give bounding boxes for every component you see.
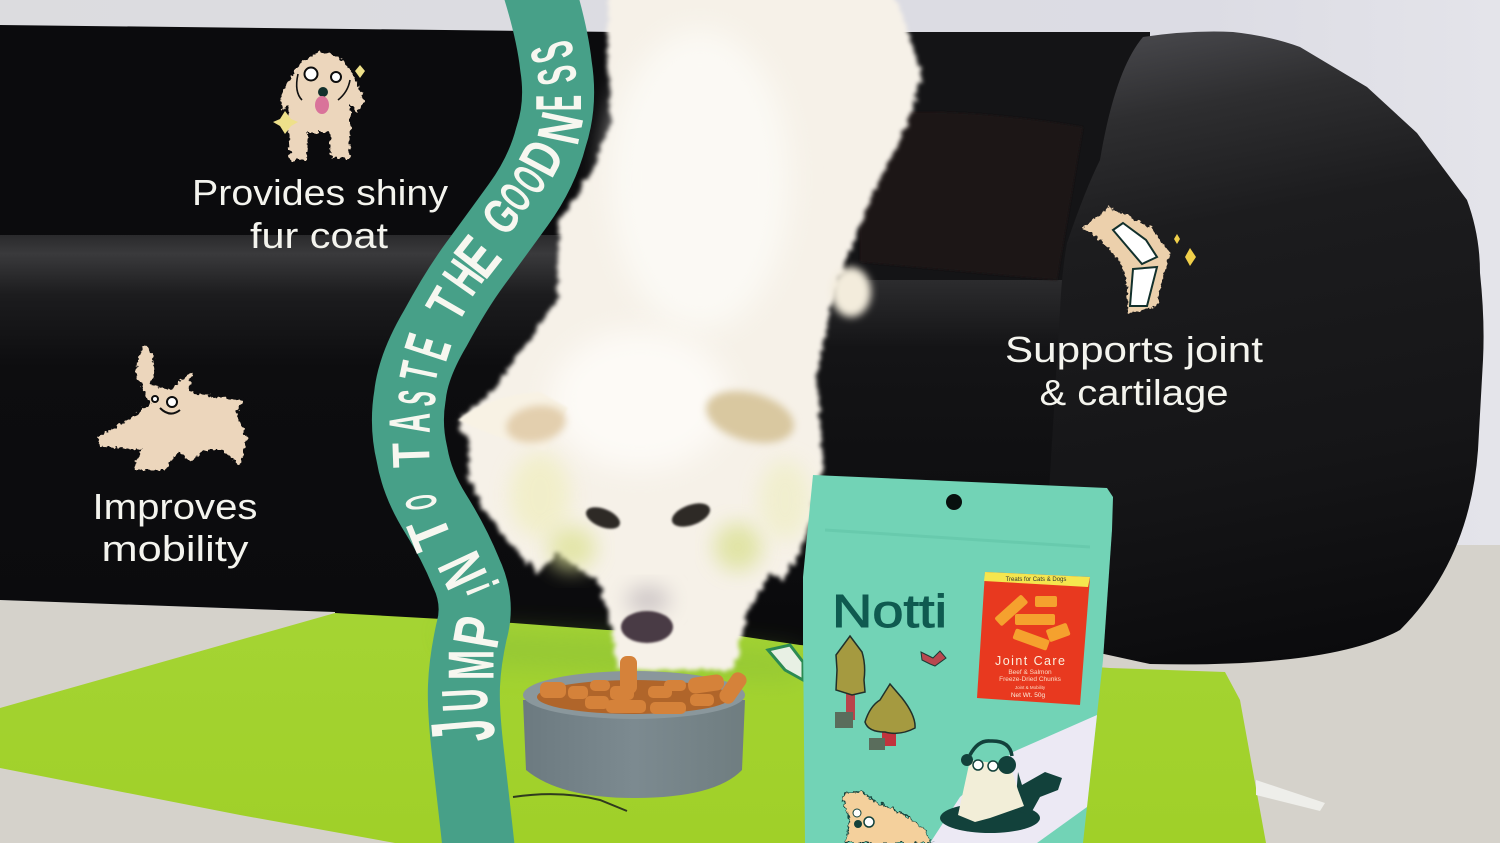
product bag — [803, 475, 1113, 843]
ribbon text: JUMP!N TO TASTE THE GOODNESS: S — [526, 61, 590, 89]
ribbon text: JUMP!N TO TASTE THE GOODNESS: S — [517, 35, 587, 69]
icon: fluffy dog — [273, 52, 365, 160]
text: Improves — [92, 486, 258, 527]
ribbon text: JUMP!N TO TASTE THE GOODNESS: T — [389, 357, 451, 387]
ribbon text: JUMP!N TO TASTE THE GOODNESS: ! — [455, 572, 511, 602]
ribbon text: JUMP!N TO TASTE THE GOODNESS — [377, 35, 596, 747]
benefit: improves mobility: mobility — [102, 528, 248, 569]
ribbon text: JUMP!N TO TASTE THE GOODNESS: G — [472, 189, 532, 245]
green mat — [0, 613, 1266, 843]
curly dog on bag — [842, 792, 932, 843]
label: Beef & Salmon — [1008, 669, 1052, 676]
white dog — [458, 0, 922, 670]
ribbon text: JUMP!N TO TASTE THE GOODNESS: H — [430, 249, 496, 305]
trees — [835, 636, 915, 750]
icon: knee joint — [1083, 207, 1196, 313]
label: Joint Care — [995, 654, 1065, 668]
ribbon text: JUMP!N TO TASTE THE GOODNESS: M — [436, 650, 508, 680]
ribbon text: JUMP!N TO TASTE THE GOODNESS: N — [425, 542, 501, 598]
benefit: shiny fur coat: fur coat — [250, 215, 388, 256]
ribbon text: JUMP!N TO TASTE THE GOODNESS: J — [412, 715, 514, 747]
benefit: shiny fur coat — [192, 52, 448, 256]
text: Provides shiny — [192, 172, 448, 213]
kibble — [540, 656, 749, 714]
right ear — [700, 382, 800, 452]
icon: leaping dog — [98, 346, 247, 470]
ribbon text: JUMP!N TO TASTE THE GOODNESS: P — [438, 611, 516, 653]
nose — [626, 586, 670, 614]
ribbon text: JUMP!N TO TASTE THE GOODNESS: U — [428, 687, 502, 713]
brand logo: Notti — [832, 585, 947, 637]
ribbon text: JUMP!N TO TASTE THE GOODNESS: E — [442, 224, 514, 290]
label: Freeze-Dried Chunks — [999, 676, 1062, 683]
butterfly — [921, 651, 946, 666]
ribbon text: JUMP!N TO TASTE THE GOODNESS: S — [386, 387, 448, 409]
ribbon text: JUMP!N TO TASTE THE GOODNESS: E — [524, 95, 596, 111]
paw — [831, 267, 871, 317]
ribbon text: JUMP!N TO TASTE THE GOODNESS: T — [395, 507, 465, 559]
label: Joint & Mobility — [1015, 685, 1046, 690]
ribbon text: JUMP!N TO TASTE THE GOODNESS: O — [502, 156, 558, 204]
left ear — [458, 392, 568, 450]
eyes — [583, 503, 623, 533]
food bowl — [523, 656, 749, 798]
benefit: joint and cartilage: & cartilage — [1040, 372, 1228, 413]
freeze-dried chunks — [994, 594, 1071, 651]
hang hole — [946, 494, 962, 510]
bag tag on floor — [1256, 780, 1325, 811]
ribbon text: JUMP!N TO TASTE THE GOODNESS: T — [382, 441, 442, 468]
label — [977, 572, 1090, 705]
ribbon banner — [377, 0, 596, 843]
label: Net Wt. 50g — [1011, 692, 1046, 699]
ribbon text: JUMP!N TO TASTE THE GOODNESS: O — [488, 173, 542, 221]
toy on mat — [768, 645, 803, 680]
ribbon text: JUMP!N TO TASTE THE GOODNESS: O — [396, 490, 448, 514]
white hill — [930, 715, 1097, 843]
ribbon text: JUMP!N TO TASTE THE GOODNESS: A — [377, 413, 443, 433]
ribbon text: JUMP!N TO TASTE THE GOODNESS: N — [524, 106, 596, 150]
skateboarding cat — [940, 741, 1062, 833]
text: Supports joint — [1005, 329, 1263, 370]
ribbon text: JUMP!N TO TASTE THE GOODNESS: T — [415, 279, 481, 331]
ribbon text: JUMP!N TO TASTE THE GOODNESS: E — [391, 326, 465, 368]
fur tint — [510, 453, 570, 537]
benefit: joint and cartilage — [1005, 207, 1263, 413]
ribbon text: JUMP!N TO TASTE THE GOODNESS: D — [507, 130, 577, 186]
benefit: improves mobility — [92, 346, 258, 569]
label: Treats for Cats & Dogs — [1006, 577, 1066, 583]
